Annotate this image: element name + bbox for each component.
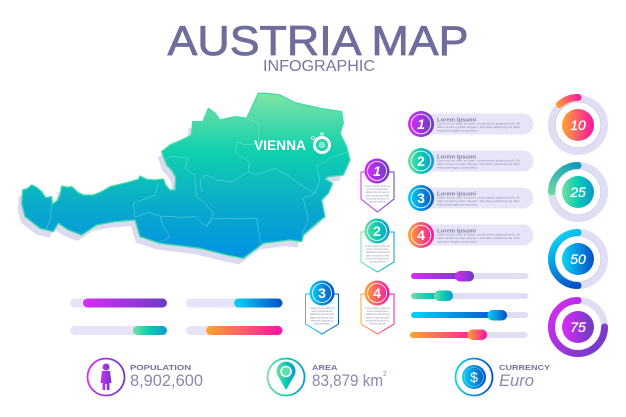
list item 4: 4 — [417, 227, 425, 243]
panel: hex card 2: diam nonummy nibh — [366, 253, 390, 257]
list item 1 — [408, 111, 534, 137]
stat: population: POPULATION — [130, 363, 191, 372]
stat: population: 8,902,600 — [130, 372, 203, 390]
slider 2 — [411, 290, 528, 301]
panel: hex card 4: euismod tincidunt ut — [366, 318, 389, 322]
list item 3: diam nonummy dolor aliquam. Sed diam adipiscing elit dolor — [437, 200, 520, 203]
donut: 50 — [552, 232, 604, 286]
panel: hex card 3: 3 — [318, 285, 326, 301]
donut: 75: 75 — [570, 319, 586, 335]
panel: hex card 2: laoreet dolore — [370, 260, 386, 264]
donut: 50: 50 — [570, 251, 586, 267]
slider 3 — [411, 310, 528, 320]
panel: hex card 2: 2 — [373, 223, 381, 239]
list item 4: Lorem ipsum dolor sit amet, consectetuer adipiscing elit. Sit — [437, 234, 520, 237]
panel: hex card 2: euismod tincidunt ut — [366, 256, 389, 260]
list item 2: diam nonummy dolor aliquam. Sed diam adipiscing elit dolor — [437, 163, 520, 166]
panel: hex card 3: amet consectetuer — [311, 309, 333, 313]
panel: hex card 1: diam nonummy nibh — [366, 193, 390, 197]
list item 2: 2 — [417, 153, 425, 169]
list item 3: 3 — [417, 190, 425, 206]
list item 3: Lorem Ipsumi — [437, 192, 477, 198]
panel: hex card 3: laoreet dolore — [314, 322, 330, 326]
stat: area: 83,879 km — [312, 372, 383, 390]
panel: hex card 4: 4 — [373, 285, 381, 301]
donut: 10 — [552, 97, 604, 152]
list item 4: diam nonummy dolor aliquam. Sed diam adipiscing elit dolor — [437, 237, 520, 240]
progress bar: purple — [70, 298, 167, 308]
slider 4 — [410, 330, 528, 340]
panel: hex card 4 — [361, 280, 394, 334]
stat: area: AREA — [312, 363, 338, 372]
list item 2: Lorem Ipsumi — [437, 154, 477, 160]
panel: hex card 1: 1 — [373, 163, 381, 179]
panel: hex card 4: amet consectetuer — [367, 309, 388, 313]
label: Vienna: VIENNA — [254, 138, 306, 153]
subtitle: INFOGRAPHIC — [263, 58, 375, 75]
panel: hex card 1 — [361, 158, 394, 212]
progress bar: orange — [186, 326, 282, 335]
donut: 25 — [552, 166, 604, 218]
stat: currency: Euro — [499, 372, 534, 390]
stat: currency — [456, 358, 550, 396]
list item 4 — [408, 222, 534, 248]
panel: hex card 3: adipiscing elit sed do — [310, 312, 335, 316]
stat: currency: CURRENCY — [499, 363, 550, 372]
panel: hex card 3: Lorem ipsum dolor sit — [310, 306, 335, 310]
panel: hex card 1: euismod tincidunt ut — [366, 196, 389, 200]
list item 2 — [408, 148, 534, 174]
stat: area — [268, 358, 387, 396]
panel: hex card 4: Lorem ipsum dolor sit — [365, 306, 390, 310]
donut: 75 — [552, 300, 604, 354]
panel: hex card 4: adipiscing elit sed do — [365, 312, 390, 316]
progress bar: teal — [70, 326, 167, 335]
list item 4: Lorem Ipsumi — [437, 228, 477, 234]
icon: person — [88, 358, 124, 396]
list item 3: erat duis feugiat consectetur. — [437, 204, 478, 207]
list item 1: Lorem Ipsumi — [437, 118, 477, 124]
icon: Vienna marker — [312, 133, 330, 152]
list item 1: Lorem ipsum dolor sit amet, consectetuer adipiscing elit. Sit — [437, 123, 520, 126]
progress bar: blue — [186, 298, 282, 308]
slider 1 — [411, 271, 528, 282]
panel: hex card 1: Lorem ipsum dolor sit — [365, 184, 390, 188]
list item 1: erat duis feugiat consectetur. — [437, 130, 478, 133]
list item 4: erat duis feugiat consectetur. — [437, 241, 478, 244]
donut: 10: 10 — [570, 117, 586, 133]
list item 2: erat duis feugiat consectetur. — [437, 167, 478, 170]
panel: hex card 2: adipiscing elit sed do — [365, 250, 390, 254]
icon: map pin — [268, 358, 304, 396]
list item 3: Lorem ipsum dolor sit amet, consectetuer adipiscing elit. Sit — [437, 197, 520, 200]
panel: hex card 2: Lorem ipsum dolor sit — [365, 244, 390, 248]
panel: hex card 3: diam nonummy nibh — [310, 315, 334, 319]
list item 1: diam nonummy dolor aliquam. Sed diam adipiscing elit dolor — [437, 126, 520, 129]
title: AUSTRIA MAP — [168, 17, 468, 64]
panel: hex card 2 — [361, 218, 394, 272]
list item 3 — [408, 185, 534, 211]
panel: hex card 1: laoreet dolore — [370, 200, 386, 204]
icon: dollar coin: $ — [470, 369, 478, 385]
donut: 25: 25 — [569, 184, 586, 200]
panel: hex card 1: amet consectetuer — [367, 187, 388, 191]
panel: hex card 4: diam nonummy nibh — [366, 315, 390, 319]
list item 2: Lorem ipsum dolor sit amet, consectetuer adipiscing elit. Sit — [437, 160, 520, 163]
list item 1: 1 — [417, 116, 425, 132]
panel: hex card 3: euismod tincidunt ut — [310, 318, 334, 322]
panel: hex card 4: laoreet dolore — [370, 322, 386, 326]
panel: hex card 1: adipiscing elit sed do — [365, 190, 390, 194]
stat: population — [88, 358, 203, 396]
panel: hex card 2: amet consectetuer — [367, 247, 388, 251]
stat: area: 2 — [383, 371, 387, 378]
panel: hex card 3 — [306, 280, 338, 334]
map of Austria — [18, 93, 350, 264]
